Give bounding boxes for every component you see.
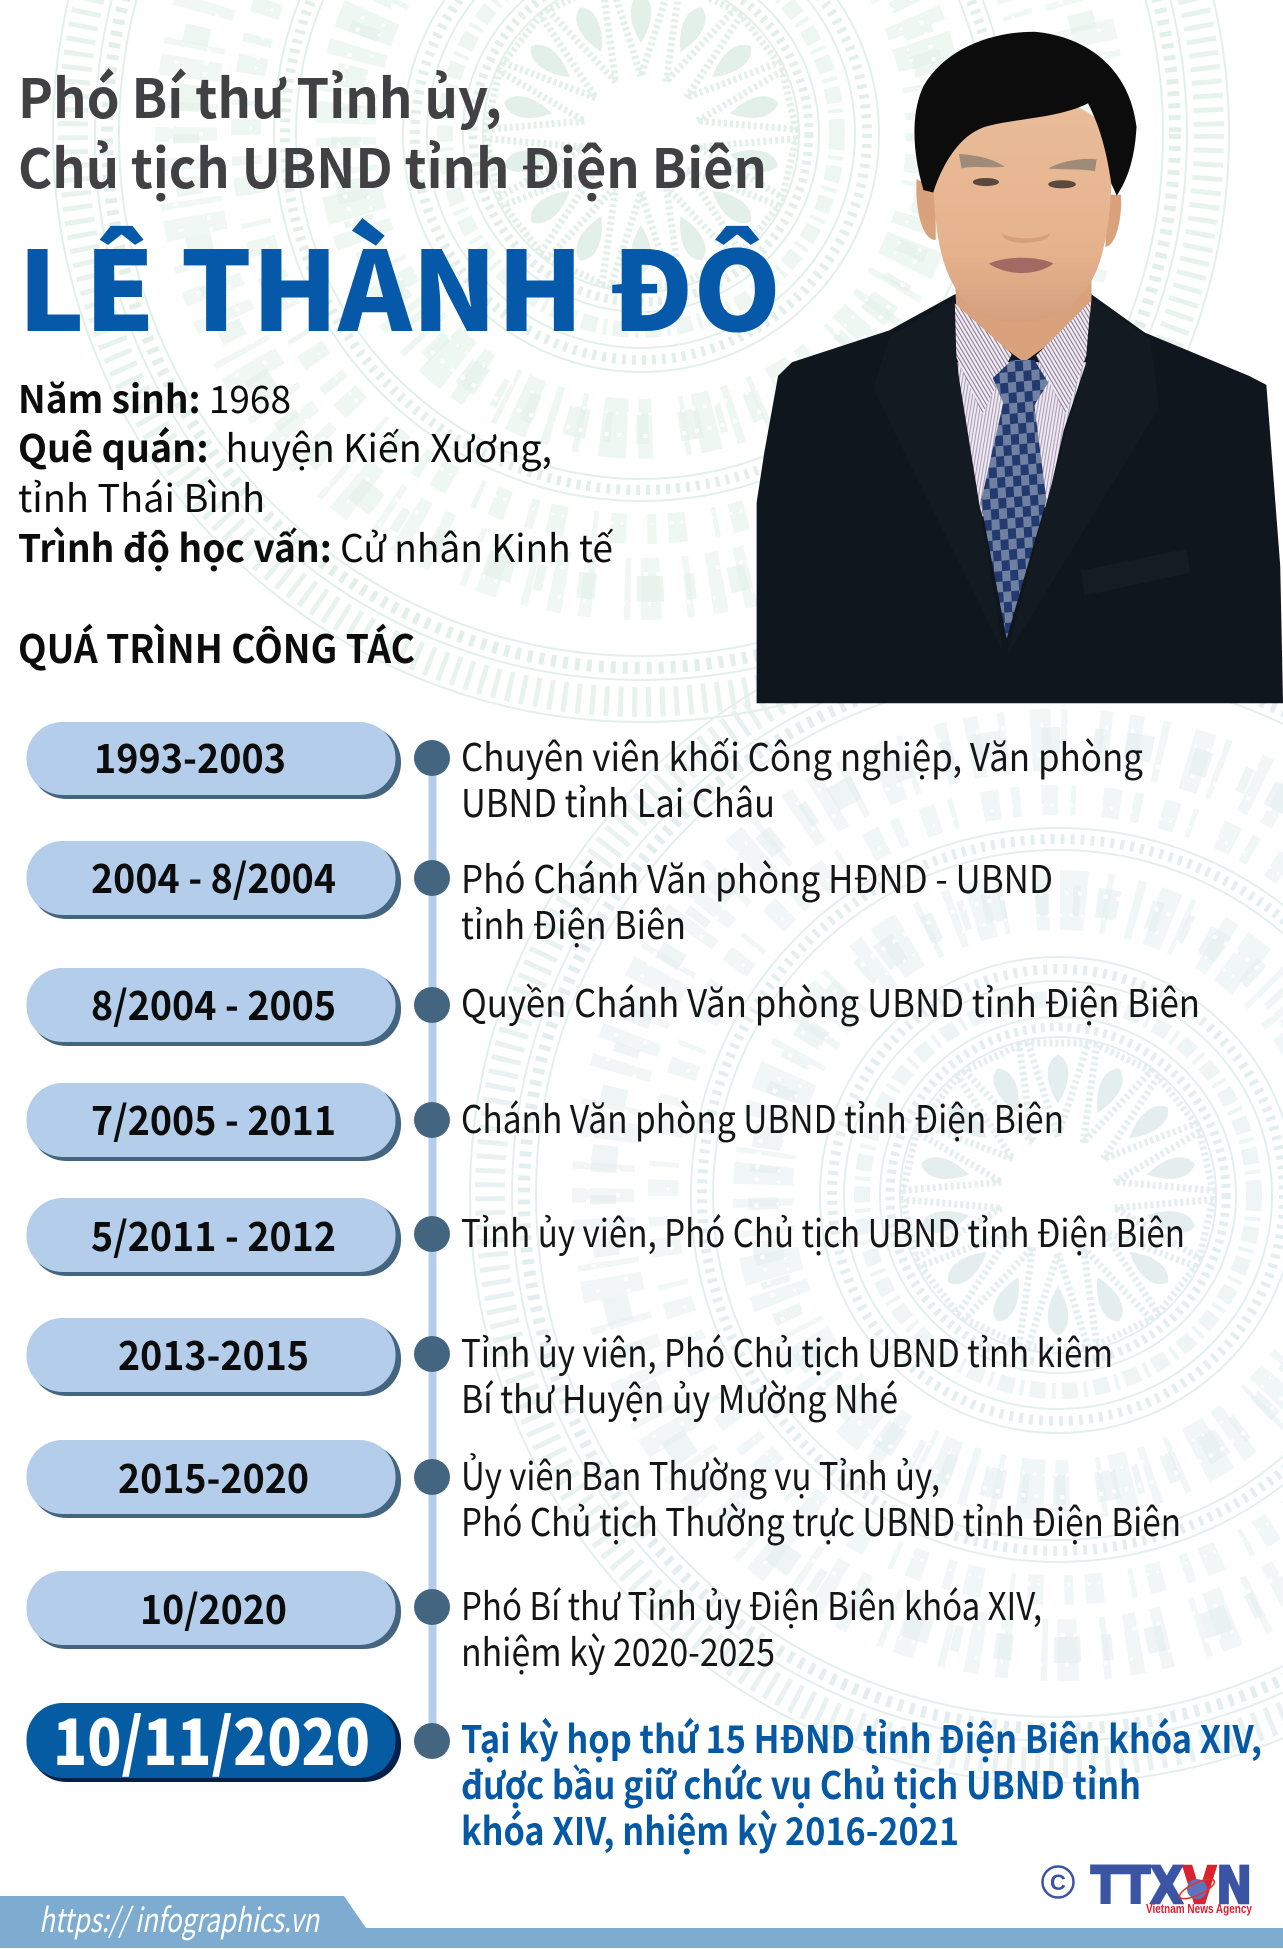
background: bronze drum pattern top xyxy=(53,0,1229,722)
personal info block: Năm sinh: 1968 xyxy=(18,369,291,424)
footer url: https:// infographics.vn xyxy=(39,1894,320,1942)
eyebrows xyxy=(959,154,1097,171)
timeline row 3 xyxy=(26,968,1200,1046)
timeline row 4: Chánh Văn phòng UBND tỉnh Điện Biên xyxy=(461,1089,1064,1144)
timeline row 9: highlighted: khóa XIV, nhiệm kỳ 2016-2021 xyxy=(461,1801,959,1856)
background: bronze drum pattern bottom xyxy=(470,607,1283,1783)
title: position xyxy=(18,55,767,204)
timeline row 9: highlighted: 10/11/2020 xyxy=(53,1692,370,1784)
timeline row 6: Bí thư Huyện ủy Mường Nhé xyxy=(461,1369,898,1424)
hair xyxy=(914,32,1137,196)
timeline row 2: 2004 - 8/2004 xyxy=(91,847,336,905)
personal info block: Quê quán: huyện Kiến Xương, xyxy=(18,418,552,473)
timeline row 1: 1993-2003 xyxy=(94,727,286,785)
timeline row 9: highlighted xyxy=(26,1692,1262,1856)
timeline row 2 xyxy=(26,841,1053,950)
nose shadow xyxy=(1001,233,1050,243)
portrait photo xyxy=(757,32,1283,703)
personal info block: Trình độ học vấn: Cử nhân Kinh tế xyxy=(18,518,614,573)
timeline row 7: Ủy viên Ban Thường vụ Tỉnh ủy, xyxy=(461,1446,940,1501)
timeline row 1: Chuyên viên khối Công nghiệp, Văn phòng xyxy=(461,727,1143,782)
neck xyxy=(955,272,1091,362)
timeline row 8 xyxy=(26,1571,1042,1677)
timeline row 8: Phó Bí thư Tỉnh ủy Điện Biên khóa XIV, xyxy=(461,1576,1042,1631)
timeline row 1 xyxy=(26,722,1143,828)
suit xyxy=(757,294,1283,703)
breast pocket xyxy=(1081,549,1190,595)
timeline row 7: Phó Chủ tịch Thường trực UBND tỉnh Điện Biên xyxy=(461,1492,1181,1547)
jacket lapels xyxy=(873,299,1159,657)
timeline row 6 xyxy=(26,1318,1113,1424)
timeline row 9: highlighted: được bầu giữ chức vụ Chủ tịch UBND tỉnh xyxy=(461,1755,1141,1810)
shirt collar right xyxy=(1036,301,1091,414)
necktie xyxy=(981,360,1048,638)
timeline row 6: Tỉnh ủy viên, Phó Chủ tịch UBND tỉnh kiêm xyxy=(461,1323,1113,1378)
title: position: Chủ tịch UBND tỉnh Điện Biên xyxy=(18,125,767,204)
timeline row 7: 2015-2020 xyxy=(118,1447,309,1505)
ears xyxy=(916,179,1121,247)
timeline row 8: 10/2020 xyxy=(140,1578,287,1636)
timeline row 2: Phó Chánh Văn phòng HĐND - UBND xyxy=(461,849,1053,904)
logo: TTXVN: TTXVN xyxy=(1091,1857,1252,1916)
logo: TTXVN: Vietnam News Agency xyxy=(1146,1902,1252,1916)
footer band xyxy=(0,1896,1283,1948)
mouth xyxy=(989,258,1053,273)
timeline row 5 xyxy=(26,1198,1185,1276)
timeline row 6: 2013-2015 xyxy=(118,1324,309,1382)
face xyxy=(932,91,1112,323)
timeline row 3: Quyền Chánh Văn phòng UBND tỉnh Điện Biên xyxy=(461,973,1200,1028)
timeline row 4 xyxy=(26,1083,1064,1161)
logo: copyright symbol xyxy=(1042,1866,1074,1898)
personal info block xyxy=(18,369,614,573)
timeline row 3: 8/2004 - 2005 xyxy=(91,974,336,1032)
timeline row 8: nhiệm kỳ 2020-2025 xyxy=(461,1622,775,1677)
title: name: LÊ THÀNH ĐÔ xyxy=(18,203,781,363)
timeline row 1: UBND tỉnh Lai Châu xyxy=(461,773,775,828)
timeline row 2: tỉnh Điện Biên xyxy=(461,895,686,950)
timeline row 4: 7/2005 - 2011 xyxy=(91,1089,336,1147)
personal info block: tỉnh Thái Bình xyxy=(18,468,265,523)
shirt collar left xyxy=(954,302,1012,414)
shirt xyxy=(957,362,1086,516)
eyes xyxy=(973,178,999,186)
logo: copyright symbol: C xyxy=(1050,1870,1066,1895)
timeline row 7 xyxy=(26,1440,1181,1547)
timeline row 5: Tỉnh ủy viên, Phó Chủ tịch UBND tỉnh Điện Biên xyxy=(461,1203,1185,1258)
section heading: QUÁ TRÌNH CÔNG TÁC xyxy=(18,619,415,675)
timeline line xyxy=(428,758,436,1743)
title: position: Phó Bí thư Tỉnh ủy, xyxy=(18,55,502,134)
timeline row 5: 5/2011 - 2012 xyxy=(91,1205,336,1263)
